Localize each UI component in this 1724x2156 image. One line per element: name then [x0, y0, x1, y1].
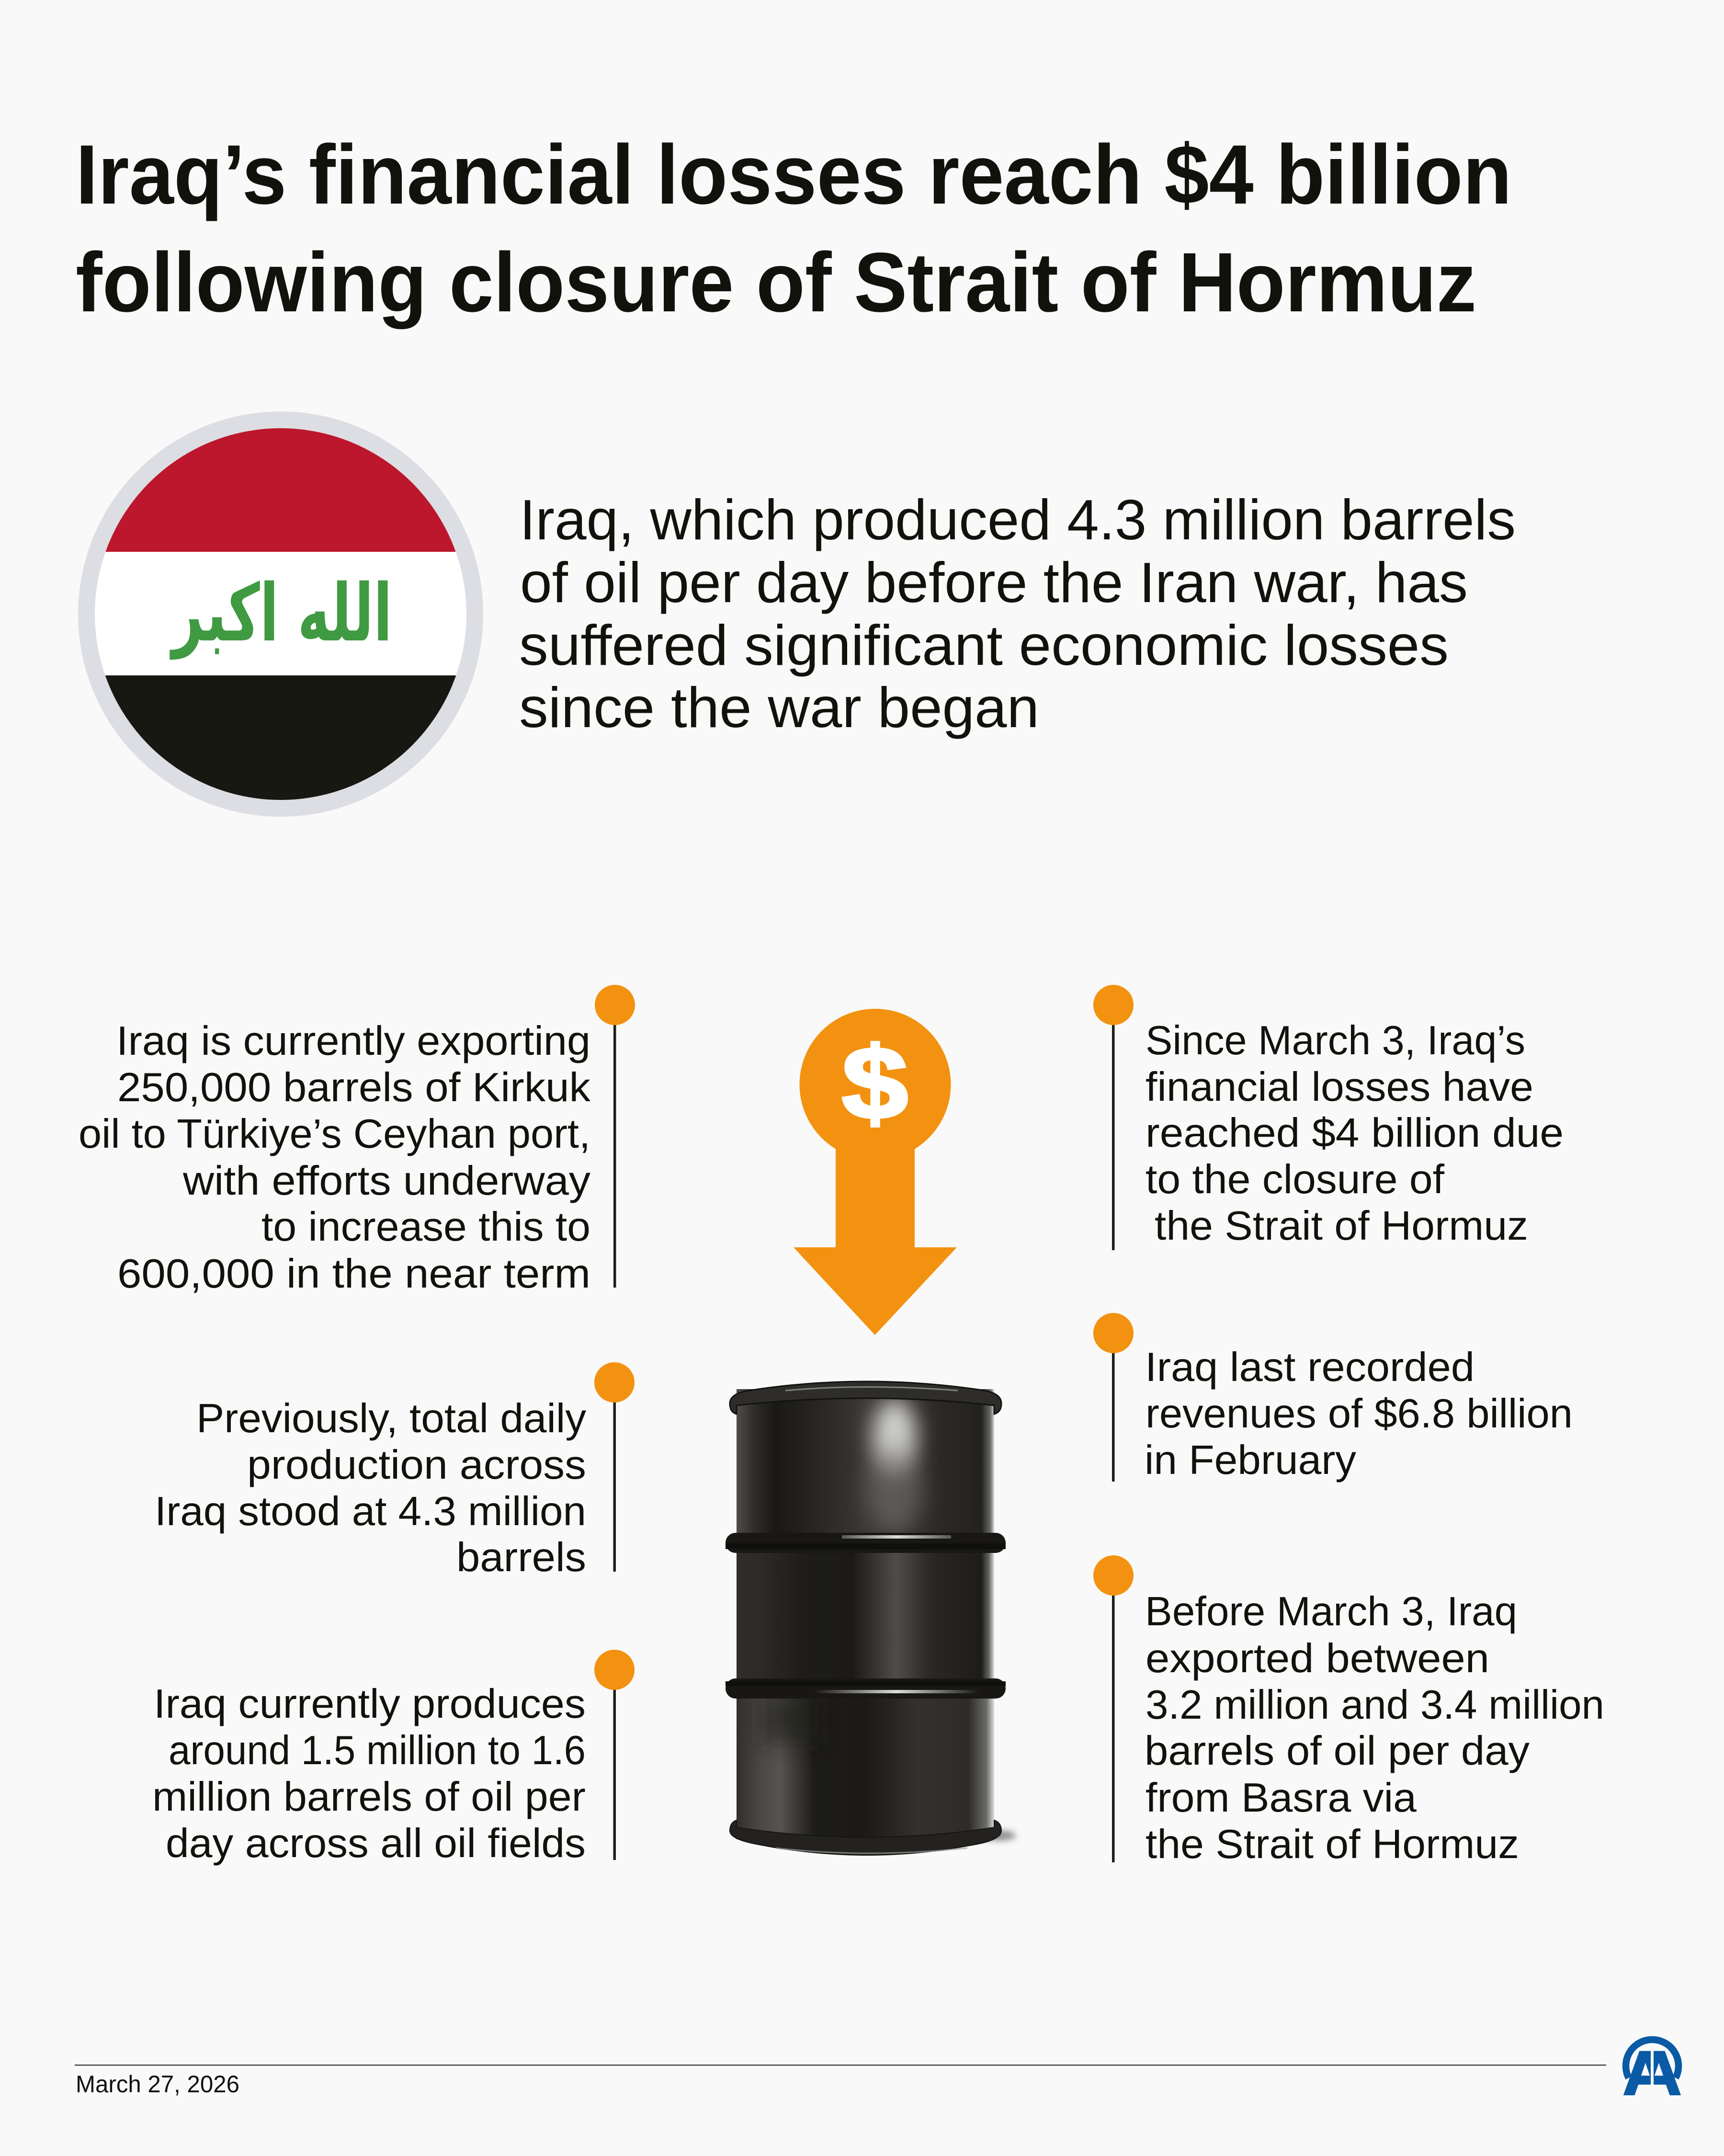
right item: financial losses: Since March 3, Iraq’s — [1146, 1018, 1525, 1063]
right item: February revenues: revenues of $6.8 billion — [1146, 1391, 1573, 1437]
left item: Kirkuk exports: 600,000 in the near term — [117, 1251, 590, 1297]
right item: financial losses: financial losses have — [1146, 1064, 1533, 1110]
barrel lower section — [737, 1691, 994, 1839]
title: following closure of Strait of Hormuz — [76, 236, 1476, 330]
right item: February revenues: in February — [1145, 1437, 1357, 1483]
right item: February revenues — [1093, 1313, 1573, 1483]
right item: financial losses — [1093, 985, 1564, 1250]
right item: pre-closure exports: from Basra via — [1146, 1775, 1417, 1821]
left item: previous production: Previously, total daily — [196, 1396, 587, 1441]
left item: Kirkuk exports: Iraq is currently exporting — [116, 1018, 590, 1064]
logo: Anadolu Agency AA: A — [1623, 2039, 1667, 2107]
left item: Kirkuk exports: 250,000 barrels of Kirkuk — [117, 1065, 591, 1110]
left item: Kirkuk exports: with efforts underway — [182, 1158, 591, 1204]
right item: pre-closure exports: the Strait of Hormuz — [1146, 1822, 1519, 1867]
left item: previous production — [155, 1362, 635, 1580]
icon: oil barrel — [726, 1381, 1016, 1855]
intro text: of oil per day before the Iran war, has — [520, 551, 1468, 615]
icon: dollar coin with down arrow — [794, 1009, 957, 1335]
barrel shadow — [981, 1831, 1016, 1840]
logo: Anadolu Agency AA: A — [1637, 2039, 1681, 2107]
title: Iraq’s financial losses reach $4 billion — [76, 128, 1512, 222]
upper rib — [726, 1533, 1006, 1553]
icon: Iraq flag in round badge: الله اكبر — [170, 568, 392, 660]
right item: pre-closure exports: Before March 3, Iraq — [1145, 1589, 1517, 1634]
barrel upper section — [737, 1389, 994, 1538]
left item: previous production: production across — [247, 1442, 586, 1488]
intro text: Iraq, which produced 4.3 million barrels — [520, 488, 1516, 552]
icon: Iraq flag in round badge — [78, 411, 483, 817]
right item: pre-closure exports: barrels of oil per day — [1145, 1728, 1530, 1774]
left item: current production: around 1.5 million to 1.6 — [169, 1728, 586, 1773]
left item: previous production: barrels — [456, 1535, 586, 1580]
intro text — [519, 488, 1516, 740]
title — [76, 128, 1512, 330]
right item: pre-closure exports — [1093, 1555, 1604, 1867]
right item: pre-closure exports: 3.2 million and 3.4 million — [1146, 1682, 1604, 1728]
date: March 27, 2026 — [76, 2071, 239, 2098]
intro text: since the war began — [519, 676, 1039, 740]
bottom rim — [730, 1820, 1001, 1855]
right item: February revenues: Iraq last recorded — [1145, 1345, 1474, 1390]
left item: Kirkuk exports — [79, 985, 635, 1297]
left item: Kirkuk exports: to increase this to — [261, 1204, 590, 1250]
right item: pre-closure exports: exported between — [1146, 1636, 1489, 1681]
top rim — [730, 1381, 1001, 1414]
right item: financial losses: reached $4 billion due — [1146, 1110, 1564, 1156]
intro text: suffered significant economic losses — [519, 614, 1449, 677]
left item: current production: Iraq currently produces — [154, 1681, 586, 1727]
left item: current production: million barrels of oil per — [152, 1774, 586, 1820]
left item: current production — [152, 1650, 635, 1866]
left item: previous production: Iraq stood at 4.3 million — [155, 1489, 586, 1534]
icon: dollar coin with down arrow: $ — [842, 1026, 908, 1141]
left item: Kirkuk exports: oil to Türkiye’s Ceyhan port, — [79, 1111, 590, 1157]
right item: financial losses: the Strait of Hormuz — [1155, 1203, 1528, 1249]
lower rib — [726, 1678, 1006, 1699]
right item: financial losses: to the closure of — [1146, 1157, 1444, 1202]
barrel middle section — [737, 1553, 994, 1678]
left item: current production: day across all oil fields — [166, 1821, 586, 1866]
